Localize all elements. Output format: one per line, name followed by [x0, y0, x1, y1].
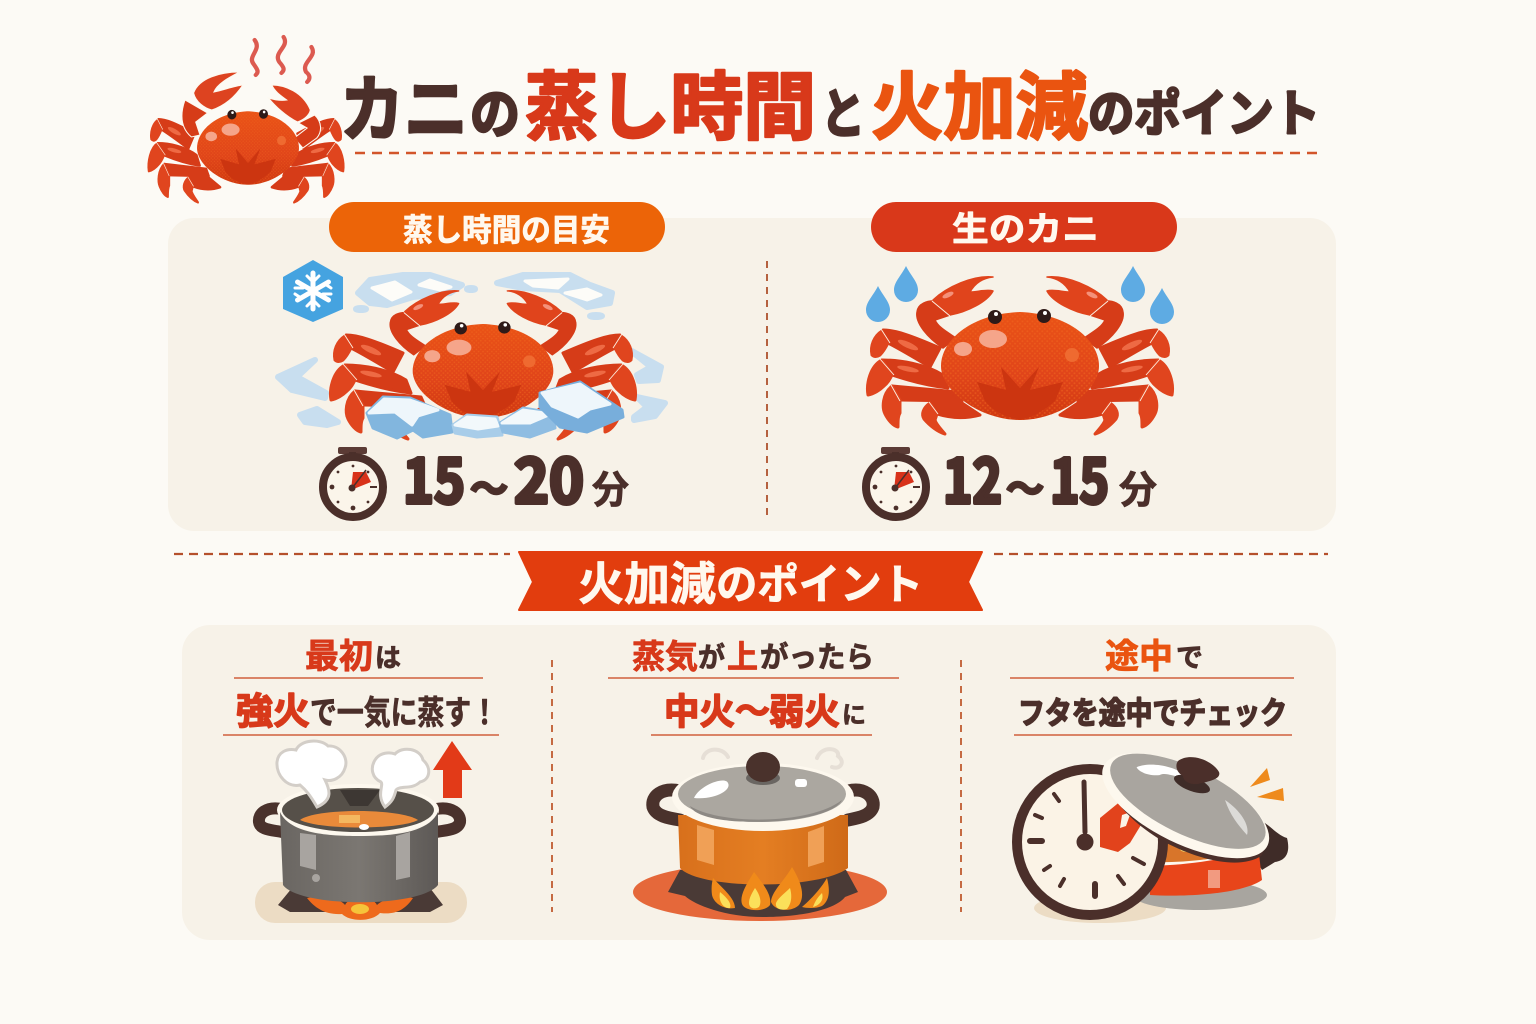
title: と [821, 70, 865, 149]
pot handles [653, 790, 873, 820]
step 1 text: high heat [223, 629, 499, 735]
step 2 text: medium to low heat: がったら [760, 634, 874, 676]
time: frozen crab 15-20 minutes: 分 [592, 459, 629, 514]
panel: steaming times [168, 202, 1336, 531]
step 3 text: check lid midway: で [1176, 636, 1203, 675]
step 2 text: medium to low heat: 弱火 [769, 683, 840, 735]
lid knob [1172, 757, 1219, 797]
icon: snowflake hexagon [283, 260, 343, 322]
step 2 text: medium to low heat: に [842, 695, 866, 730]
heading pill: raw crab [871, 202, 1177, 252]
step 2 text: medium to low heat: 中火 [664, 683, 735, 735]
title: カニ [340, 51, 468, 156]
pot handle [1256, 820, 1288, 870]
step 1 text: high heat: で一気に蒸す！ [310, 686, 498, 734]
time: frozen crab 15-20 minutes: 20 [514, 432, 584, 521]
raw crab illustration [868, 277, 1172, 434]
step 3 text: check lid midway: 途中 [1105, 629, 1173, 678]
time: raw crab 12-15 minutes: 15 [1050, 432, 1109, 521]
ice and water background [278, 275, 665, 425]
title: のポイント [1088, 74, 1320, 146]
time: frozen crab 15-20 minutes [323, 432, 629, 521]
title: 火加減 [871, 48, 1088, 155]
step 2 text: medium to low heat: 蒸気 [632, 630, 698, 678]
ribbon heading: heat control points: 火加減 [578, 548, 716, 614]
panel: heat steps [182, 625, 1336, 940]
step 1 illustration: gray pot on high flame [255, 741, 467, 923]
step 1 text: high heat: 最初 [305, 629, 373, 678]
accent marks [1250, 768, 1284, 801]
time: frozen crab 15-20 minutes: ～ [470, 457, 508, 515]
step 1 text: high heat: は [375, 638, 401, 675]
time: raw crab 12-15 minutes: 分 [1119, 459, 1157, 514]
step 1 text: high heat: 強火 [236, 681, 310, 735]
pot lid knob [746, 752, 780, 785]
steam clouds [277, 741, 429, 807]
step 2 text: medium to low heat: ～ [735, 684, 770, 733]
header crab illustration [148, 37, 344, 202]
step 3 illustration: clock and open pot [1017, 732, 1288, 923]
flames [712, 867, 829, 910]
step 2 illustration: orange pot on medium flame [633, 749, 887, 921]
step 3 text: check lid midway [1010, 629, 1294, 735]
clock [1017, 769, 1163, 915]
heading pill: raw crab: 生のカニ [952, 202, 1099, 251]
time: raw crab 12-15 minutes: ～ [1006, 457, 1044, 515]
ice cubes [367, 382, 623, 438]
title [340, 48, 1320, 156]
heading pill: steaming guide [329, 202, 665, 252]
tilted pot lid [1085, 732, 1284, 883]
frozen crab illustration [278, 275, 665, 439]
heading pill: steaming guide: 蒸し時間の目安 [403, 205, 610, 250]
step 2 text: medium to low heat: が [698, 636, 725, 676]
icon: water drops [866, 266, 1174, 324]
time: raw crab 12-15 minutes [866, 432, 1157, 521]
arrow: heat up [433, 741, 472, 798]
ribbon heading: heat control points [519, 548, 982, 614]
step 3 text: check lid midway: フタを途中でチェック [1018, 688, 1287, 733]
icon: steam wisps [252, 37, 313, 82]
time: raw crab 12-15 minutes: 12 [943, 432, 1002, 521]
title: 蒸し時間 [525, 48, 816, 155]
pot handles [259, 808, 460, 832]
time: frozen crab 15-20 minutes: 15 [403, 432, 465, 521]
title: の [470, 70, 520, 149]
step 2 text: medium to low heat [608, 630, 899, 735]
step 2 text: medium to low heat: 上 [727, 632, 758, 678]
ribbon heading: heat control points: のポイント [716, 551, 923, 612]
faint steam [703, 749, 842, 768]
